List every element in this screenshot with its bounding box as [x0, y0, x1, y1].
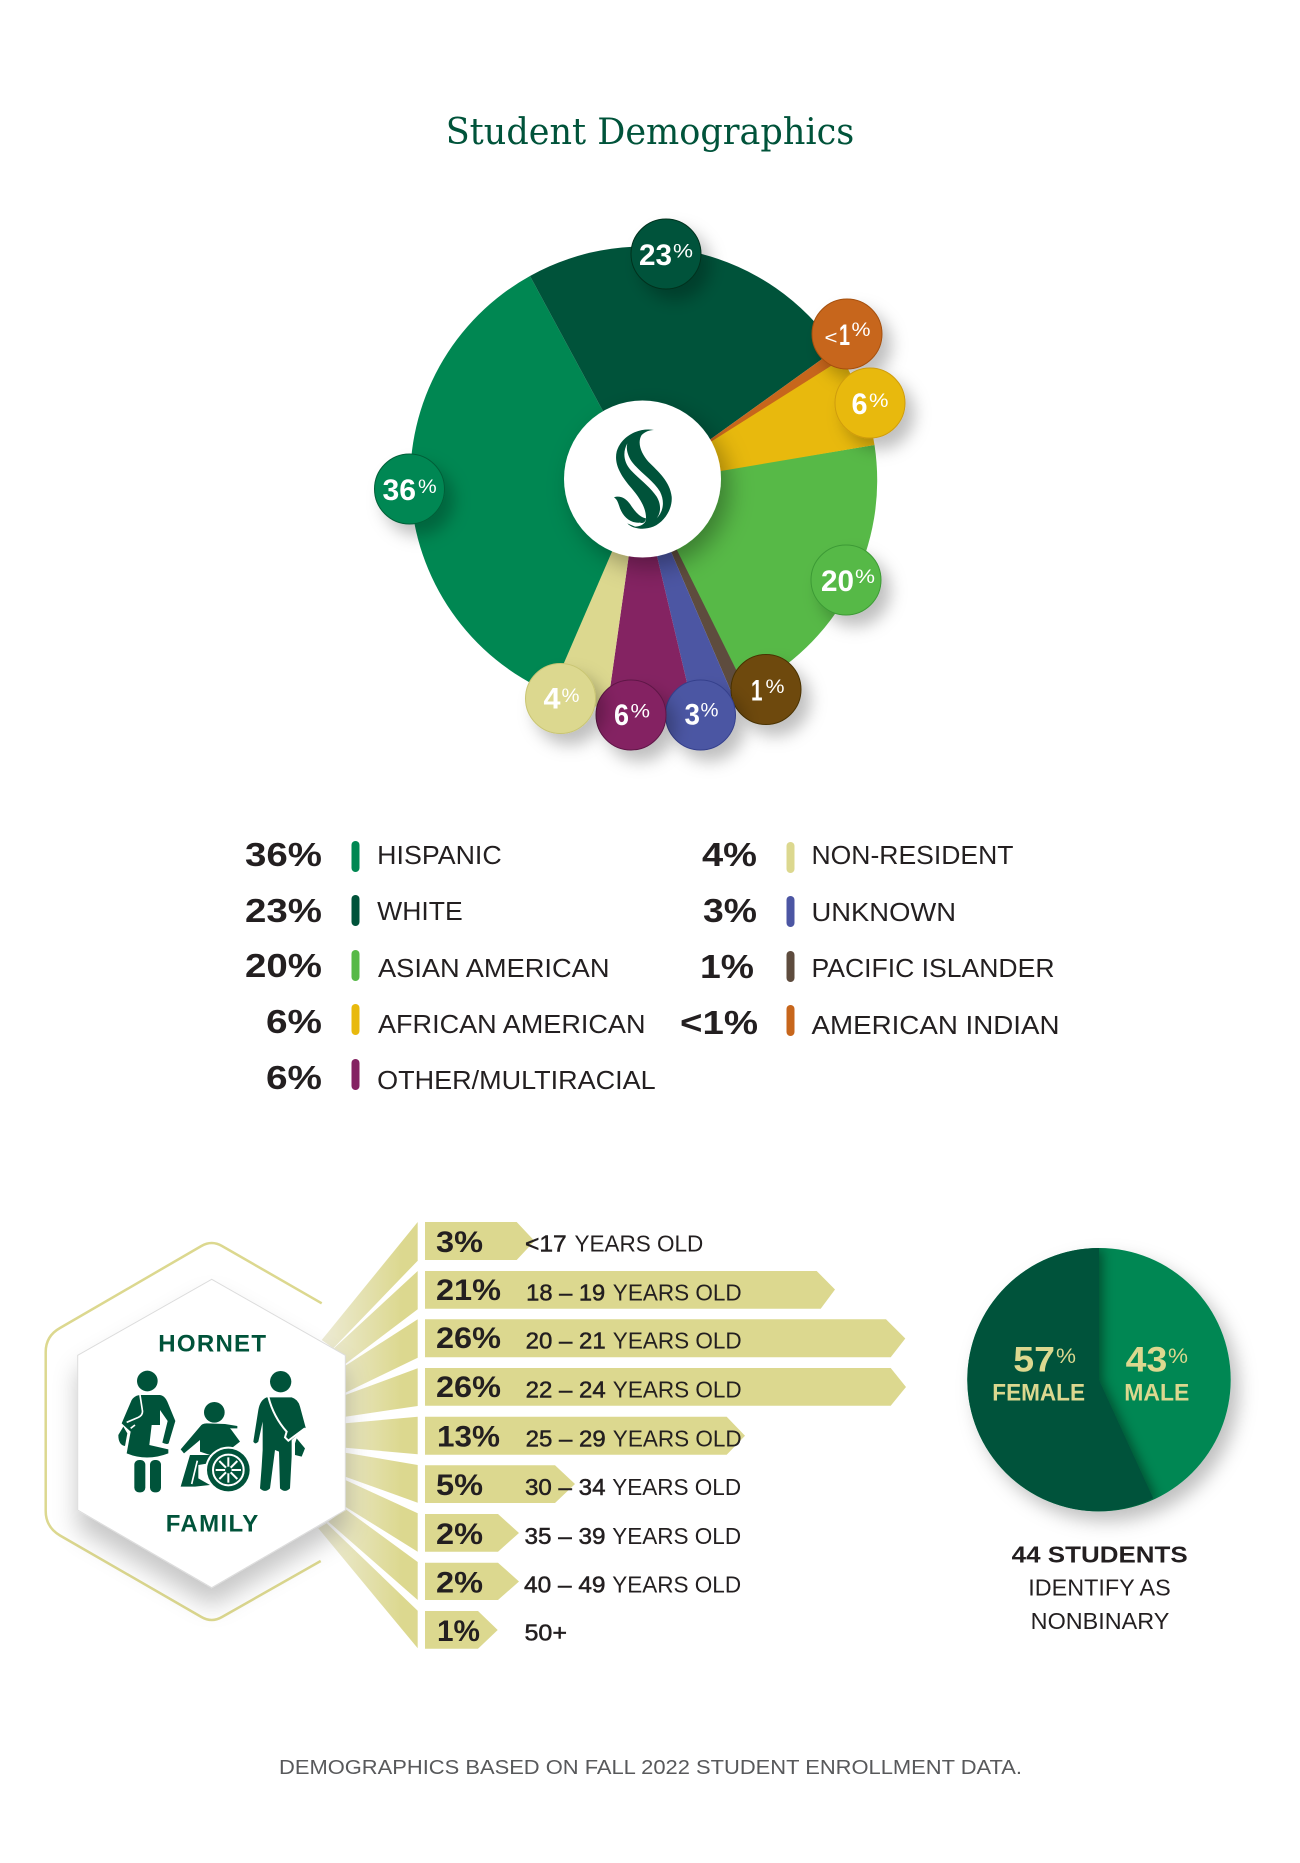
- age row: 18-19: 18 – 19: [526, 1280, 605, 1306]
- age row: 25-29: [425, 1417, 745, 1455]
- age row: 20-21: 26%: [436, 1322, 501, 1355]
- slice: Hispanic 36%: [410, 276, 644, 693]
- slice: American Indian <1%: [644, 349, 842, 487]
- legend row: African American: [266, 1003, 646, 1040]
- age row: 25-29: YEARS OLD: [613, 1426, 742, 1452]
- slice: female 57%: [964, 1248, 1153, 1511]
- legend row: White: 23%: [245, 892, 322, 929]
- label: 57% female: %: [1056, 1345, 1076, 1368]
- nonbinary note: [1012, 1541, 1188, 1634]
- legend row: American Indian: <1%: [680, 1004, 758, 1041]
- legend row: Non-resident: 4%: [702, 836, 757, 873]
- legend: ethnicity: [245, 836, 1060, 1096]
- age row: 30-34: YEARS OLD: [612, 1474, 741, 1500]
- badge 3%: 3: [684, 699, 700, 732]
- age row: 18-19: YEARS OLD: [613, 1280, 742, 1306]
- pie chart: student ethnicity: [410, 247, 877, 713]
- age row: 20-21: 20 – 21: [526, 1328, 606, 1354]
- age row: 35-39: 35 – 39: [524, 1523, 606, 1549]
- legend row: White: [245, 892, 463, 929]
- legend row: Asian American: 20%: [245, 947, 322, 984]
- badge 20%: 20: [821, 565, 854, 598]
- legend row: Other/Multiracial: [266, 1059, 656, 1096]
- age row: 22-24: YEARS OLD: [613, 1377, 742, 1403]
- legend row: African American: 6%: [266, 1003, 322, 1040]
- age row: 30-34: 5%: [436, 1469, 483, 1502]
- legend row: Unknown: 3%: [703, 892, 757, 929]
- heading: FAMILY: FAMILY: [166, 1511, 258, 1538]
- label: 57% female: [992, 1341, 1085, 1407]
- legend row: Hispanic: HISPANIC: [377, 840, 502, 870]
- badge 6% Other: 6: [614, 699, 629, 732]
- age bars: [425, 1222, 906, 1649]
- badge 36%: %: [418, 477, 437, 498]
- age row: 35-39: YEARS OLD: [612, 1523, 741, 1549]
- label: 43% male: 43: [1126, 1341, 1167, 1380]
- pie chart: gender: [964, 1248, 1231, 1511]
- legend row: Hispanic: 36%: [245, 836, 322, 873]
- badge <1%: <: [824, 328, 838, 349]
- age row: 30-34: 30 – 34: [525, 1474, 606, 1500]
- age row: 25-29: 13%: [437, 1420, 500, 1454]
- nonbinary note: IDENTIFY AS: [1028, 1575, 1171, 1601]
- age row: 18-19: [425, 1271, 835, 1309]
- badge 1%: 1: [751, 674, 762, 708]
- age row: 20-21: [425, 1319, 905, 1357]
- legend row: Pacific Islander: [700, 948, 1054, 985]
- title: Student Demographics: [446, 112, 854, 153]
- slice: Asian American 20%: [644, 445, 877, 690]
- slice: African American 6%: [644, 359, 874, 484]
- label: 43% male: MALE: [1124, 1380, 1189, 1407]
- icon: three students: [118, 1371, 306, 1493]
- age row: 40-49: [425, 1563, 741, 1600]
- age row: 35-39: 2%: [436, 1518, 483, 1551]
- badge 6% Other: [596, 680, 666, 750]
- legend row: Other/Multiracial: 6%: [266, 1059, 322, 1096]
- label: 57% female: FEMALE: [992, 1380, 1085, 1407]
- age row: 35-39: [425, 1514, 741, 1552]
- age row: 40-49: YEARS OLD: [612, 1572, 741, 1598]
- hexagon: Hornet Family: [46, 1243, 345, 1620]
- legend row: Pacific Islander: 1%: [700, 948, 754, 985]
- slice: Unknown 3%: [653, 540, 733, 708]
- badge 6% Other: %: [630, 702, 650, 722]
- legend row: Unknown: UNKNOWN: [812, 897, 956, 927]
- heading: HORNET: HORNET: [158, 1331, 266, 1358]
- age row: 50+: 1%: [437, 1615, 480, 1648]
- age row: 40-49: 40 – 49: [524, 1572, 606, 1598]
- legend row: White: WHITE: [377, 896, 463, 926]
- badge 6% African American: %: [869, 391, 889, 412]
- badge 4%: 4: [544, 682, 561, 716]
- badge 4%: %: [562, 686, 580, 707]
- legend row: African American: AFRICAN AMERICAN: [378, 1009, 646, 1039]
- slice: Non-resident 4%: [551, 540, 631, 710]
- age row: 25-29: 25 – 29: [526, 1426, 606, 1452]
- legend row: Non-resident: NON-RESIDENT: [812, 840, 1014, 870]
- footer note: DEMOGRAPHICS BASED ON FALL 2022 STUDENT ENROLLMENT DATA.: [279, 1756, 1022, 1779]
- slice: White 23%: [530, 247, 836, 487]
- badge <1%: [812, 299, 882, 369]
- age row: under 17: YEARS OLD: [574, 1231, 703, 1257]
- badge 6% African American: [835, 368, 905, 438]
- badge 3%: [666, 680, 736, 750]
- percentage badges: [374, 219, 905, 750]
- badge 20%: %: [855, 567, 875, 588]
- center logo disc: [564, 400, 721, 558]
- slice: Other/Multiracial 6%: [607, 540, 693, 713]
- label: 57% female: 57: [1013, 1341, 1055, 1380]
- legend row: Other/Multiracial: OTHER/MULTIRACIAL: [377, 1065, 656, 1095]
- badge 36%: [374, 454, 444, 524]
- badge 6% African American: 6: [852, 388, 868, 421]
- legend row: Unknown: [703, 892, 956, 929]
- badge 23%: %: [673, 242, 693, 262]
- badge 4%: [526, 664, 596, 734]
- age row: under 17: <17: [525, 1231, 567, 1257]
- legend row: Pacific Islander: PACIFIC ISLANDER: [812, 953, 1054, 983]
- legend row: American Indian: [680, 1004, 1060, 1041]
- badge 20%: [811, 545, 881, 615]
- legend row: Hispanic: [245, 836, 502, 873]
- slice: Pacific Islander 1%: [666, 540, 746, 696]
- age row: under 17: [425, 1222, 703, 1260]
- label: 43% male: %: [1168, 1345, 1188, 1368]
- age row: 20-21: YEARS OLD: [613, 1328, 742, 1354]
- badge <1%: %: [852, 320, 871, 341]
- icon: student with messenger bag: [253, 1371, 306, 1491]
- slice: male 43%: [967, 1248, 1231, 1511]
- age row: 22-24: 26%: [436, 1371, 501, 1404]
- badge 3%: %: [700, 700, 719, 722]
- age row: 50+: [425, 1611, 567, 1649]
- age row: 18-19: 21%: [436, 1274, 501, 1307]
- badge <1%: 1: [839, 319, 850, 352]
- age row: 50+: 50+: [524, 1620, 567, 1646]
- icon: S logo: [614, 429, 672, 529]
- legend row: Asian American: ASIAN AMERICAN: [378, 953, 610, 983]
- badge 1%: [731, 654, 801, 724]
- badge 23%: [631, 219, 701, 289]
- hexagon outer outline: [46, 1243, 322, 1620]
- age row: 40-49: 2%: [436, 1566, 483, 1600]
- label: 43% male: [1124, 1341, 1189, 1407]
- hexagon inner panel: [78, 1279, 345, 1588]
- icon: student with books: [118, 1371, 175, 1492]
- badge 1%: %: [766, 677, 785, 698]
- legend row: American Indian: AMERICAN INDIAN: [812, 1010, 1060, 1040]
- nonbinary note: 44 STUDENTS: [1012, 1541, 1188, 1567]
- age row: 30-34: [425, 1465, 741, 1503]
- nonbinary note: NONBINARY: [1031, 1608, 1169, 1634]
- age row: 22-24: [425, 1368, 906, 1406]
- icon: student in wheelchair: [181, 1402, 252, 1493]
- legend row: Asian American: [245, 947, 610, 984]
- age row: 22-24: 22 – 24: [526, 1377, 606, 1403]
- legend row: Non-resident: [702, 836, 1014, 873]
- badge 36%: 36: [382, 474, 416, 507]
- badge 23%: 23: [639, 239, 672, 272]
- age row: under 17: 3%: [436, 1226, 483, 1259]
- rays into age bars: [318, 1222, 418, 1648]
